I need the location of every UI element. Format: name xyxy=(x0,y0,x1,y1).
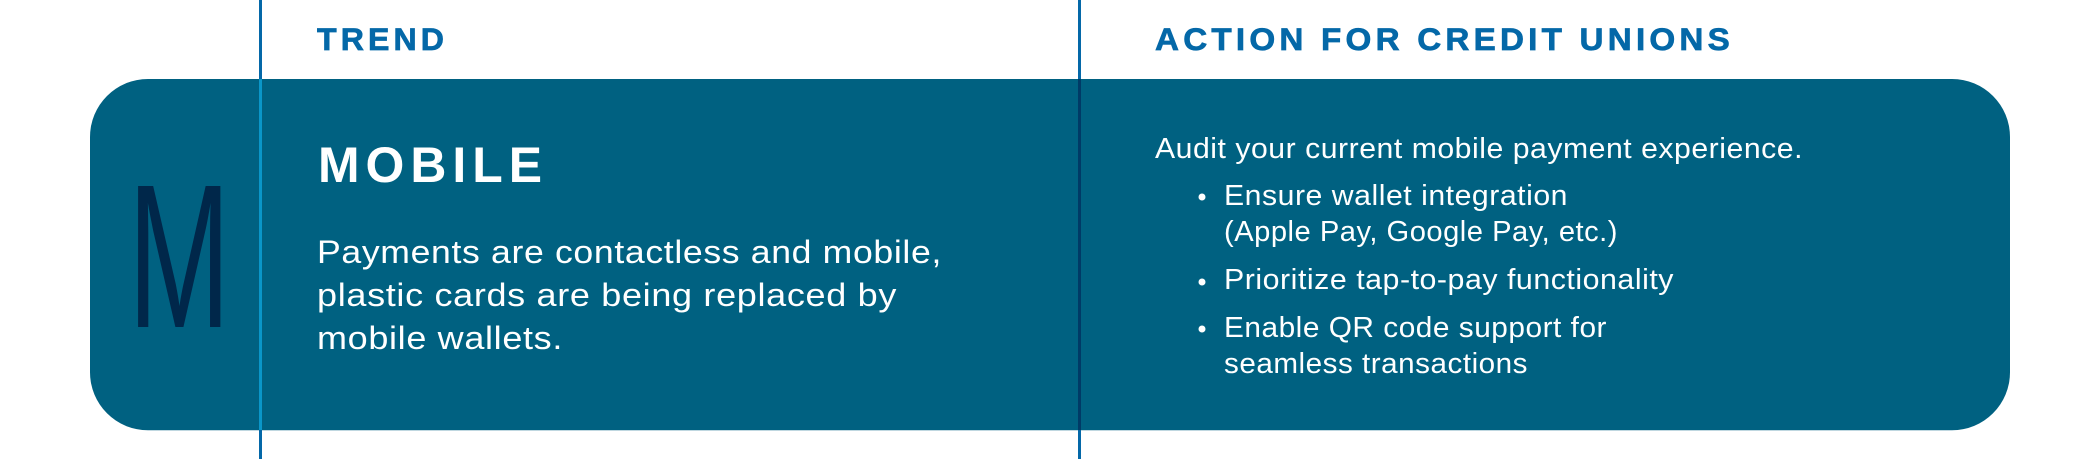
panel: mobile row background xyxy=(90,79,2010,430)
bullet: wallet integration: Ensure wallet integration xyxy=(1224,180,1568,212)
bullet: wallet integration: (Apple Pay, Google Pay, etc.) xyxy=(1224,216,1618,248)
large letter M: M xyxy=(128,141,230,371)
action lead sentence: Audit your current mobile payment experience. xyxy=(1155,133,1803,165)
trend description: Payments are contactless and mobile, xyxy=(317,234,942,270)
bullet: QR code support xyxy=(1198,312,1607,380)
bullet: wallet integration xyxy=(1198,180,1618,248)
trend description: plastic cards are being replaced by xyxy=(317,277,897,313)
bullet: QR code support: Enable QR code support for xyxy=(1224,312,1607,344)
bullet: tap-to-pay: Prioritize tap-to-pay functionality xyxy=(1224,264,1674,296)
column heading: action for credit unions: ACTION FOR CREDIT UNIONS xyxy=(1155,21,1734,57)
trend title: MOBILE xyxy=(318,137,548,193)
column divider: action xyxy=(1078,0,1081,459)
trend description xyxy=(317,234,942,356)
action bullet list xyxy=(1198,180,1674,380)
trend description: mobile wallets. xyxy=(317,320,563,356)
column heading: trend: TREND xyxy=(317,21,448,57)
bullet: QR code support: seamless transactions xyxy=(1224,348,1528,380)
column divider: trend xyxy=(259,0,262,459)
